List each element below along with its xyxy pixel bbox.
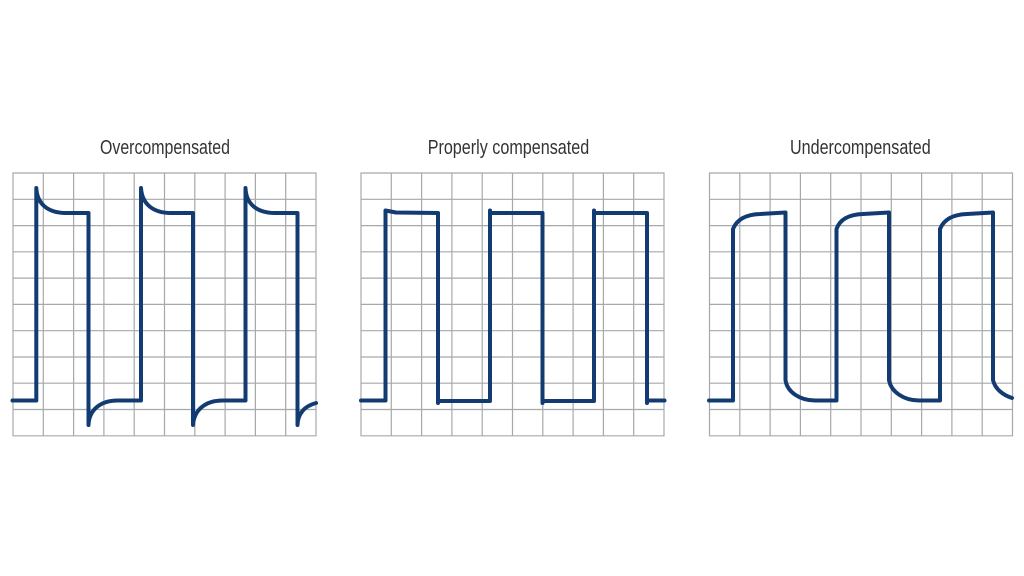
waveform: properly compensated — [361, 210, 664, 403]
panel: undercompensated — [709, 137, 1012, 436]
grid: undercompensated — [710, 173, 1012, 436]
grid: properly compensated — [361, 173, 664, 436]
waveform: undercompensated — [709, 212, 1012, 400]
panel: overcompensated — [12, 137, 316, 436]
waveform: overcompensated — [12, 188, 316, 425]
grid: overcompensated — [13, 173, 316, 436]
panel: properly compensated — [361, 137, 664, 436]
heading: Properly compensated: Properly compensated — [428, 137, 589, 159]
heading: Undercompensated: Undercompensated — [790, 137, 931, 159]
heading: Overcompensated: Overcompensated — [100, 137, 230, 159]
